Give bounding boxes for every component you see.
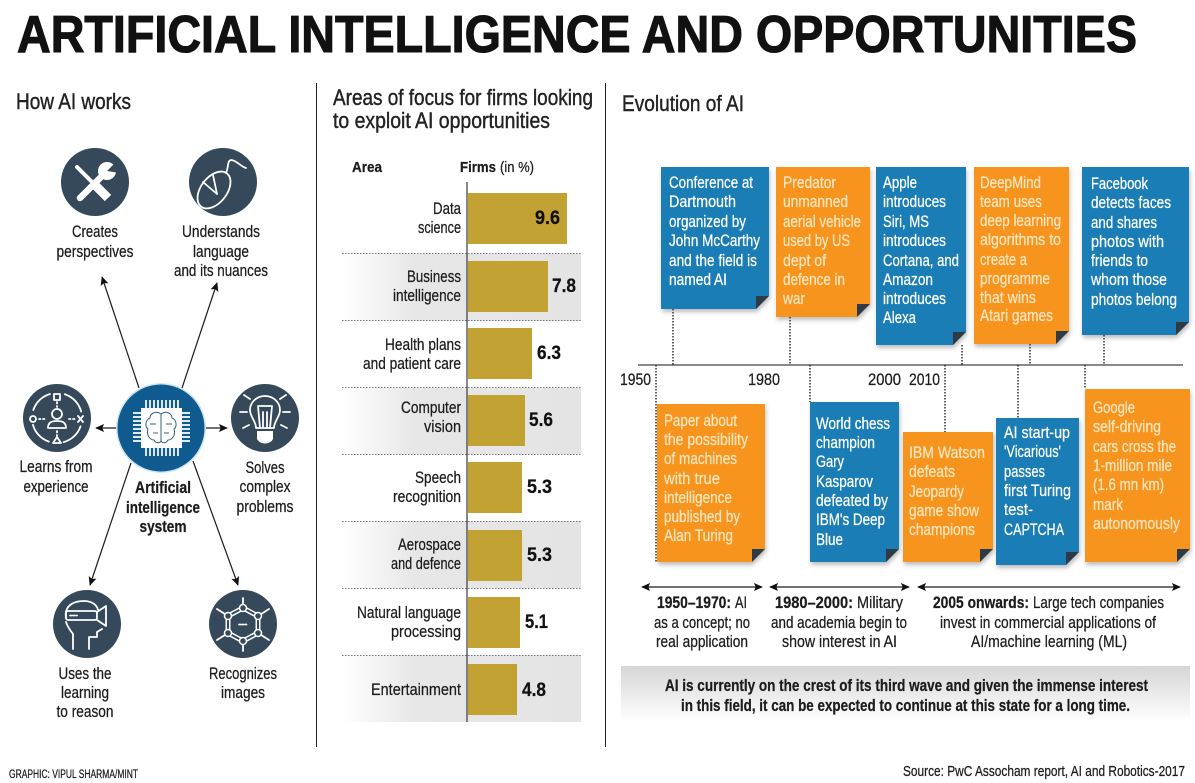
card: Turing paper: the possibility xyxy=(664,431,749,449)
callout xyxy=(621,666,1190,722)
label: uses the learning to reason xyxy=(56,665,114,721)
caption: 1980-2000 xyxy=(771,594,907,651)
divider right xyxy=(604,83,606,747)
caption: 2005 onwards: invest in commercial applications of xyxy=(940,614,1156,632)
bar: data science: 9.6 xyxy=(535,208,560,229)
card: Apple, MS, Amazon: introduces xyxy=(883,290,946,308)
heading: areas of focus xyxy=(333,85,593,133)
label: understands language: language xyxy=(193,243,249,261)
bar: computer vision: vision xyxy=(424,418,461,436)
table header: Firms xyxy=(460,159,496,176)
bar: business intelligence: 7.8 xyxy=(552,276,576,297)
label: creates perspectives xyxy=(56,223,134,261)
panel: how AI works xyxy=(16,89,299,721)
bar: entertainment: Entertainment xyxy=(371,681,461,699)
bar: speech recognition: 5.3 xyxy=(527,477,552,498)
card: Predator: dept of xyxy=(783,252,826,270)
card: Facebook: Facebook xyxy=(1091,175,1149,193)
label: solves complex problems: Solves xyxy=(246,459,284,477)
card: Google self-driving: Google xyxy=(1093,399,1135,417)
card: Vicarious: AI start-up xyxy=(1004,424,1070,442)
label: creates perspectives: Creates xyxy=(72,223,118,241)
card: Google self-driving: 1-million mile xyxy=(1093,457,1172,475)
card: Deep Blue: defeated by xyxy=(816,492,889,510)
card: DeepMind: DeepMind xyxy=(980,174,1041,192)
card: DeepMind: that wins xyxy=(980,289,1036,307)
icon: mouse xyxy=(189,148,257,216)
panel: areas of focus xyxy=(333,85,593,722)
label: learns from experience: Learns from xyxy=(20,458,92,476)
card: Deep Blue xyxy=(810,402,899,562)
card: Apple, MS, Amazon: Amazon xyxy=(883,271,933,289)
bar: health plans xyxy=(363,328,561,379)
bar: entertainment xyxy=(371,664,546,715)
caption: 2005 onwards xyxy=(933,594,1164,651)
card: IBM Watson: champions xyxy=(909,521,975,539)
card: Apple, MS, Amazon: Siri, MS xyxy=(883,213,929,231)
bar: health plans: 6.3 xyxy=(537,343,561,364)
card: Predator xyxy=(776,167,870,317)
caption: 1980-2000: show interest in AI xyxy=(782,633,897,651)
heading: how AI works: How AI works xyxy=(16,89,131,114)
label: solves complex problems xyxy=(236,459,294,516)
bar: business intelligence: intelligence xyxy=(393,287,461,305)
card: IBM Watson: IBM Watson xyxy=(909,444,985,462)
icon: recognizes images network xyxy=(209,590,277,658)
card: Deep Blue: Kasparov xyxy=(816,473,874,491)
label: uses the learning to reason: Uses the xyxy=(58,665,112,683)
bar: computer vision: 5.6 xyxy=(529,410,553,431)
card: DeepMind: deep learning xyxy=(980,212,1061,230)
card: Google self-driving: autonomously xyxy=(1093,515,1181,533)
label: recognizes images: Recognizes xyxy=(209,665,277,683)
caption: 1950-1970: real application xyxy=(656,633,748,651)
heading: areas of focus: to exploit AI opportunities xyxy=(333,108,550,133)
label: artificial intelligence system xyxy=(126,479,200,536)
card: DeepMind: create a xyxy=(980,251,1028,269)
card: IBM Watson: defeats xyxy=(909,463,955,481)
card: IBM Watson xyxy=(903,432,993,562)
card: Google self-driving xyxy=(1085,389,1190,562)
bar: aerospace and defence xyxy=(391,530,552,581)
card: Dartmouth conference: Conference at xyxy=(669,174,753,192)
card: Apple, MS, Amazon: introduces xyxy=(883,193,946,211)
label: learns from experience: experience xyxy=(24,478,88,496)
card: Dartmouth conference: Dartmouth xyxy=(669,193,736,211)
timeline: 2000 xyxy=(868,371,901,389)
card: Google self-driving: cars cross the xyxy=(1093,438,1176,456)
bar: data science: Data xyxy=(433,200,462,218)
label: understands language: and its nuances xyxy=(174,262,268,280)
card: Dartmouth conference: organized by xyxy=(669,213,747,231)
card: Dartmouth conference: and the field is xyxy=(669,252,757,270)
icon: light bulb xyxy=(231,384,299,452)
card: IBM Watson: Jeopardy xyxy=(909,483,965,501)
caption: 2005 onwards: 2005 onwards: xyxy=(933,594,1029,612)
panel: evolution of AI xyxy=(620,91,1190,722)
card: Dartmouth conference: named AI xyxy=(669,271,727,289)
caption: 1950-1970: as a concept; no xyxy=(654,614,750,632)
card: Apple, MS, Amazon: Alexa xyxy=(883,309,917,327)
period arrows xyxy=(642,586,1180,588)
bar: aerospace and defence: Aerospace xyxy=(398,536,461,554)
icon: VR headset head xyxy=(53,590,121,658)
card: Vicarious: passes xyxy=(1004,463,1045,481)
caption: 1950-1970: AI xyxy=(735,594,747,612)
card: Turing paper: published by xyxy=(664,508,741,526)
label: understands language xyxy=(174,223,268,280)
caption: 1950-1970: 1950–1970: xyxy=(657,594,731,612)
icon: AI chip brain xyxy=(116,383,206,473)
label: creates perspectives: perspectives xyxy=(56,243,134,261)
card: Facebook: whom those xyxy=(1090,271,1167,289)
card: Predator: Predator xyxy=(783,174,836,192)
card: Predator: aerial vehicle xyxy=(783,213,861,231)
card: Deep Blue: Gary xyxy=(816,453,845,471)
label: uses the learning to reason: learning xyxy=(61,684,109,702)
card: Deep Blue: champion xyxy=(816,434,875,452)
card: Predator: used by US xyxy=(783,232,850,250)
bar: natural language processing: 5.1 xyxy=(525,612,548,633)
card: Apple, MS, Amazon: Cortana, and xyxy=(883,252,959,270)
card: Apple, MS, Amazon xyxy=(876,167,966,345)
bar: health plans: Health plans xyxy=(385,336,461,354)
bar: data science: science xyxy=(418,219,461,237)
heading: areas of focus: Areas of focus for firms looking xyxy=(333,85,593,110)
bar: speech recognition xyxy=(393,462,552,513)
label: recognizes images xyxy=(209,665,277,702)
heading: evolution of AI: Evolution of AI xyxy=(622,91,744,116)
card: Vicarious: 'Vicarious' xyxy=(1004,443,1061,461)
label: artificial intelligence system: intelligence xyxy=(126,499,200,517)
card: Vicarious xyxy=(996,418,1079,565)
card: Predator: unmanned xyxy=(783,193,848,211)
card: Google self-driving: (1.6 mn km) xyxy=(1093,476,1164,494)
timeline: 1980 xyxy=(748,371,780,389)
bar: business intelligence xyxy=(393,261,576,312)
card: Facebook: and shares xyxy=(1091,214,1157,232)
card: Apple, MS, Amazon: introduces xyxy=(883,232,946,250)
card: DeepMind: Atari games xyxy=(980,307,1053,325)
table header xyxy=(352,159,534,176)
card: Turing paper: with true xyxy=(663,470,720,488)
label: recognizes images: images xyxy=(221,684,265,702)
caption: 1980-2000: Military xyxy=(857,594,904,612)
card: Facebook: detects faces xyxy=(1091,194,1171,212)
timeline: 2010 xyxy=(909,371,940,389)
card: Vicarious: CAPTCHA xyxy=(1004,521,1064,539)
table header: Area xyxy=(352,159,383,176)
bar: business intelligence: Business xyxy=(407,268,461,286)
graphic credit: GRAPHIC: VIPUL SHARMA/MINT xyxy=(9,769,138,781)
card: Turing paper: of machines xyxy=(664,450,737,468)
card: Predator: defence in xyxy=(783,271,845,289)
card: Dartmouth conference: John McCarthy xyxy=(669,232,761,250)
icon: learning from experience xyxy=(23,384,91,452)
label: learns from experience xyxy=(20,458,92,496)
divider left xyxy=(316,83,318,747)
card: Facebook: friends to xyxy=(1091,252,1148,270)
bar: aerospace and defence: and defence xyxy=(391,555,461,573)
card: DeepMind: algorithms to xyxy=(980,231,1061,249)
caption: 2005 onwards: Large tech companies xyxy=(1033,594,1164,612)
card: DeepMind: programme xyxy=(980,270,1050,288)
card: Dartmouth conference xyxy=(661,167,769,309)
card: Google self-driving: mark xyxy=(1093,496,1124,514)
card: Vicarious: first Turing xyxy=(1004,482,1071,500)
card: Deep Blue: Blue xyxy=(816,531,843,549)
caption: 2005 onwards: AI/machine learning (ML) xyxy=(971,633,1127,651)
bar: health plans: and patient care xyxy=(363,355,461,373)
card: Turing paper: Paper about xyxy=(664,412,737,430)
bar: speech recognition: recognition xyxy=(393,488,461,506)
card: Turing paper xyxy=(657,404,765,562)
bar: natural language processing: Natural language xyxy=(357,604,461,622)
bar: natural language processing: processing xyxy=(391,623,461,641)
bar: natural language processing xyxy=(357,597,548,648)
bar: entertainment: 4.8 xyxy=(522,680,546,701)
bar: computer vision xyxy=(401,395,553,446)
bar: aerospace and defence: 5.3 xyxy=(527,545,552,566)
caption: 1980-2000: and academia begin to xyxy=(771,614,907,632)
caption: 1980-2000: 1980–2000: xyxy=(775,594,853,612)
bar: speech recognition: Speech xyxy=(415,469,461,487)
bar chart xyxy=(342,182,581,722)
card: Turing paper: intelligence xyxy=(664,489,732,507)
card: DeepMind xyxy=(974,167,1069,344)
label: understands language: Understands xyxy=(182,223,260,241)
icon: tools xyxy=(61,148,129,216)
card: Google self-driving: self-driving xyxy=(1093,418,1161,436)
timeline: 1950 xyxy=(620,371,651,389)
arrows from AI system xyxy=(90,277,238,585)
card: IBM Watson: game show xyxy=(909,502,979,520)
label: artificial intelligence system: system xyxy=(140,518,186,536)
card: Predator: war xyxy=(782,290,805,308)
card: Deep Blue: IBM's Deep xyxy=(816,511,885,529)
card: DeepMind: team uses xyxy=(980,193,1042,211)
bar: data science xyxy=(418,193,567,244)
label: solves complex problems: problems xyxy=(236,498,294,516)
card: Facebook: photos with xyxy=(1091,233,1164,251)
card: Vicarious: test- xyxy=(1004,501,1033,519)
table header: (in %) xyxy=(500,159,534,176)
card: Deep Blue: World chess xyxy=(816,415,890,433)
timeline xyxy=(620,309,1183,562)
card: Turing paper: Alan Turing xyxy=(664,527,733,545)
caption: 1950-1970 xyxy=(654,594,750,651)
card: Apple, MS, Amazon: Apple xyxy=(883,174,917,192)
label: uses the learning to reason: to reason xyxy=(56,703,114,721)
card: Facebook xyxy=(1082,167,1189,335)
label: artificial intelligence system: Artificial xyxy=(135,479,191,497)
bar: computer vision: Computer xyxy=(401,399,461,417)
label: solves complex problems: complex xyxy=(240,478,291,496)
card: Facebook: photos belong xyxy=(1091,291,1177,309)
